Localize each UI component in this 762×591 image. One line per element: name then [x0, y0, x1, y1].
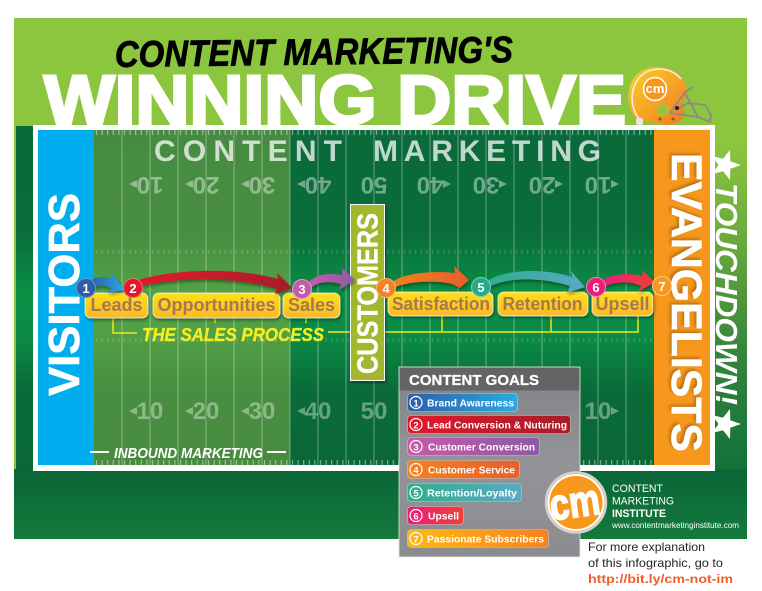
goal 5: 5	[413, 488, 419, 500]
note: more explanation	[588, 540, 733, 586]
marker 3	[292, 280, 312, 298]
stage: opportunities: Opportunities	[158, 295, 276, 315]
marker 3: 3	[298, 282, 306, 297]
helmet logo: cm	[646, 81, 664, 96]
goal 7: 7	[413, 534, 419, 546]
panel: content goals	[399, 367, 580, 557]
stage: leads	[85, 293, 148, 318]
icon: star bottom	[712, 409, 741, 439]
marker 4: 4	[382, 281, 390, 296]
goal 3: 3	[413, 442, 419, 454]
marker 7: 7	[658, 279, 666, 294]
bottom yard numbers	[129, 398, 619, 425]
arrow 4 to 5	[391, 266, 469, 288]
hash marks	[94, 130, 654, 465]
stage: upsell: Upsell	[595, 294, 650, 314]
institute name: MARKETING	[612, 496, 674, 508]
arrow 3 to customers	[308, 268, 355, 290]
bottom yard numbers: 40	[305, 398, 331, 425]
marker 7	[652, 276, 672, 296]
title: Content Marketing's: CONTENT MARKETING'S	[115, 29, 513, 75]
stage: satisfaction: Satisfaction	[392, 294, 490, 314]
upside-down yard numbers: 30	[473, 171, 499, 198]
sales process bracket	[113, 316, 638, 345]
field border	[33, 125, 715, 471]
stage: sales	[283, 293, 340, 318]
upside-down yard numbers: 40	[417, 171, 443, 198]
arrow 5 to 6	[487, 271, 585, 293]
upside-down yard numbers: 10	[585, 171, 611, 198]
goal 5: Retention/Loyalty	[427, 488, 517, 500]
left side strip	[16, 126, 34, 470]
goal 4: 4	[413, 466, 419, 476]
logo: cm badge: cm	[546, 475, 603, 530]
note: more explanation: http://bit.ly/cm-not-im	[588, 572, 733, 586]
title: Winning Drive: WINNING DRIVE	[44, 61, 626, 139]
institute name: INSTITUTE	[612, 508, 666, 520]
bottom yard numbers: 10	[585, 398, 611, 425]
marker 5: 5	[477, 280, 485, 295]
helmet shell	[628, 67, 688, 125]
label: touchdown: TOUCHDOWN!	[709, 183, 744, 405]
goal 3: Customer Conversion	[428, 442, 535, 454]
goal 1	[408, 394, 518, 412]
goal 2: 2	[413, 420, 419, 432]
bottom band	[14, 469, 747, 539]
field turf	[94, 130, 654, 465]
arrow 6 to 7	[602, 270, 655, 292]
marker 2: 2	[129, 281, 137, 296]
goal 2: Lead Conversion & Nuturing	[427, 420, 567, 432]
institute name: www.contentmarketinginstitute.com	[611, 521, 739, 530]
inbound marketing label: INBOUND MARKETING	[114, 445, 263, 462]
upside-down yard numbers: 20	[193, 171, 219, 198]
goal 4: Customer Service	[428, 464, 515, 476]
marker 1	[76, 278, 96, 298]
label: evangelists: EVANGELISTS	[662, 153, 710, 452]
step markers	[76, 276, 672, 298]
label: visitors: VISITORS	[40, 193, 89, 396]
bottom yard numbers: 20	[193, 398, 219, 425]
upside-down yard numbers: 50	[361, 171, 387, 198]
right side strip	[714, 126, 747, 470]
stage: retention: Retention	[502, 294, 582, 314]
goal 6: Upsell	[428, 510, 459, 522]
arrow 1 to 2	[90, 273, 125, 293]
yard lines	[122, 130, 626, 465]
goal 1: Brand Awareness	[427, 398, 514, 410]
marker 4	[376, 278, 396, 298]
upside-down yard numbers: 30	[249, 171, 275, 198]
icon: star top	[712, 150, 741, 180]
panel heading: CONTENT GOALS	[409, 373, 539, 389]
goal 7	[408, 530, 548, 548]
goal 5	[408, 484, 522, 502]
note: more explanation: For more explanation	[588, 540, 705, 554]
sales process label: THE SALES PROCESS	[142, 325, 324, 345]
customers box: CUSTOMERS	[352, 213, 384, 374]
panel header	[400, 368, 580, 390]
marker 1: 1	[82, 281, 90, 296]
heading: content marketing: CONTENT	[154, 135, 342, 168]
stage labels	[85, 292, 653, 318]
note: more explanation: of this infographic, go to	[588, 556, 723, 570]
upside-down yard numbers	[129, 171, 619, 198]
institute name	[611, 483, 739, 530]
goal 1: 1	[413, 398, 419, 410]
bottom yard numbers: 30	[249, 398, 275, 425]
marker 6: 6	[592, 280, 600, 295]
bottom yard numbers: 50	[361, 398, 387, 425]
stage: sales: Sales	[288, 295, 335, 315]
goal 4	[408, 460, 520, 478]
upside-down yard numbers: 20	[529, 171, 555, 198]
stage: leads: Leads	[90, 295, 143, 315]
face mask	[670, 87, 711, 122]
upside-down yard numbers: 10	[137, 171, 163, 198]
goal 2	[408, 416, 570, 434]
marker 5	[472, 278, 490, 296]
drive arrows	[90, 266, 655, 294]
goal 6	[408, 506, 464, 524]
heading: content marketing: MARKETING	[373, 135, 601, 168]
goal 3	[408, 438, 540, 456]
end zone: visitors	[38, 130, 94, 465]
arrow 2 to 3	[138, 271, 292, 294]
goal 7: Passionate Subscribers	[427, 534, 544, 546]
football field	[33, 125, 715, 471]
bottom yard numbers: 10	[137, 398, 163, 425]
goal 6: 6	[413, 512, 419, 522]
icon: helmet	[628, 67, 711, 125]
marker 6	[586, 278, 606, 296]
upside-down yard numbers: 40	[305, 171, 331, 198]
inbound marketing zone	[94, 130, 290, 465]
end zone: evangelists	[654, 130, 710, 465]
marker 2	[124, 278, 142, 298]
heading: content marketing	[154, 135, 601, 168]
institute name: CONTENT	[612, 483, 663, 495]
